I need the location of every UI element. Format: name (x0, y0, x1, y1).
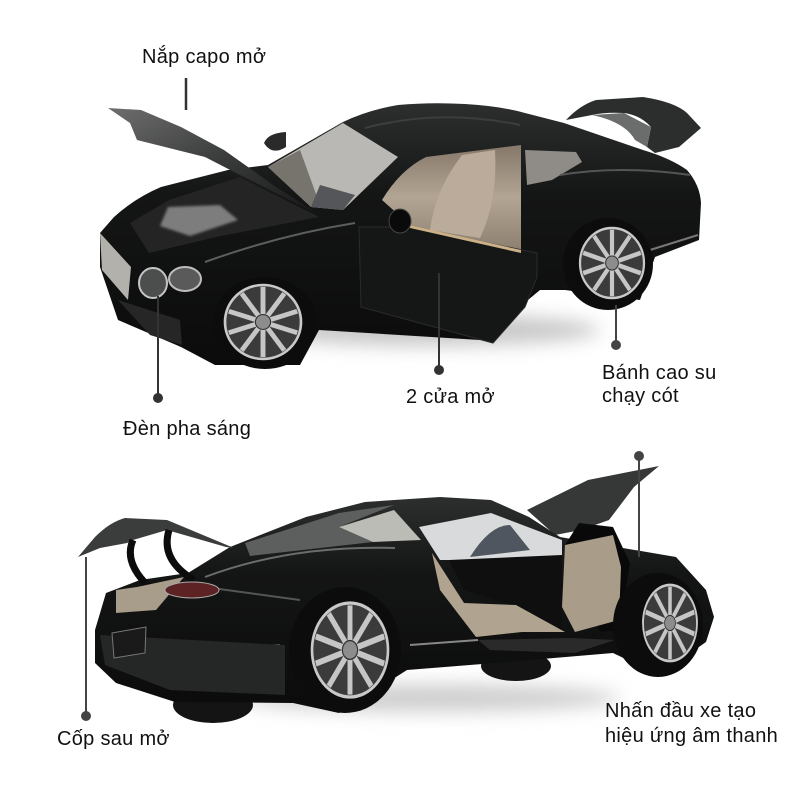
front wheel (613, 573, 703, 677)
car body (100, 103, 701, 365)
pointer: hood (185, 78, 187, 110)
windshield (268, 123, 398, 210)
trunk lid open (78, 518, 234, 557)
trunk interior (116, 577, 184, 613)
grille (100, 233, 131, 300)
dashboard (449, 555, 562, 630)
pointer: trunk (81, 557, 91, 721)
top car: Bentley model with hood, doors and trunk open (100, 97, 701, 369)
ground shadow (260, 314, 600, 346)
body gloss highlights (205, 117, 698, 262)
open hood (108, 108, 323, 217)
bottom car: rear three-quarter view (78, 466, 714, 723)
lower bumper (100, 635, 285, 695)
label: hood opens: Nắp capo mở (142, 45, 266, 68)
door sill (478, 638, 615, 653)
label: press front for sound: Nhấn đầu xe tạo (605, 700, 756, 722)
open door trim (562, 535, 621, 632)
trunk lid open (566, 97, 701, 153)
windscreen through cabin (419, 513, 562, 560)
far wheels (481, 651, 551, 681)
lower bumper (118, 300, 182, 345)
rear quarter window (525, 150, 582, 185)
pointer: rubber wheel (611, 305, 621, 350)
side mirror (264, 132, 286, 151)
engine bay (130, 177, 319, 253)
engine block (160, 205, 238, 236)
door mirror (389, 209, 411, 233)
quarter window (339, 510, 421, 542)
rear wheel (563, 218, 653, 310)
pointer: front hood press (634, 451, 644, 557)
open hood (527, 466, 659, 535)
roof glass reflection (245, 505, 394, 556)
ground shadow (240, 684, 620, 712)
car body (95, 497, 714, 713)
license plate (112, 627, 146, 658)
headlights (139, 268, 167, 298)
label: rubber wheels: Bánh cao su (602, 362, 716, 384)
door window sill (410, 225, 521, 253)
interior with seats (382, 145, 521, 250)
pointer: headlight (153, 296, 163, 403)
label: headlights: Đèn pha sáng (123, 418, 251, 440)
label: two doors open: 2 cửa mở (406, 386, 495, 408)
rear wheel (289, 587, 401, 713)
open door (359, 227, 537, 343)
tail light (165, 582, 219, 598)
front wheel (213, 277, 317, 369)
body gloss highlights (120, 548, 478, 655)
label: rubber wheels: chạy cót (602, 385, 679, 407)
label: press front for sound: hiệu ứng âm thanh (605, 725, 778, 747)
pointer: doors (434, 273, 444, 375)
open door frame (565, 523, 630, 632)
label: trunk opens: Cốp sau mở (57, 728, 170, 750)
trunk lid struts (130, 530, 194, 593)
seat and floor (432, 553, 565, 637)
